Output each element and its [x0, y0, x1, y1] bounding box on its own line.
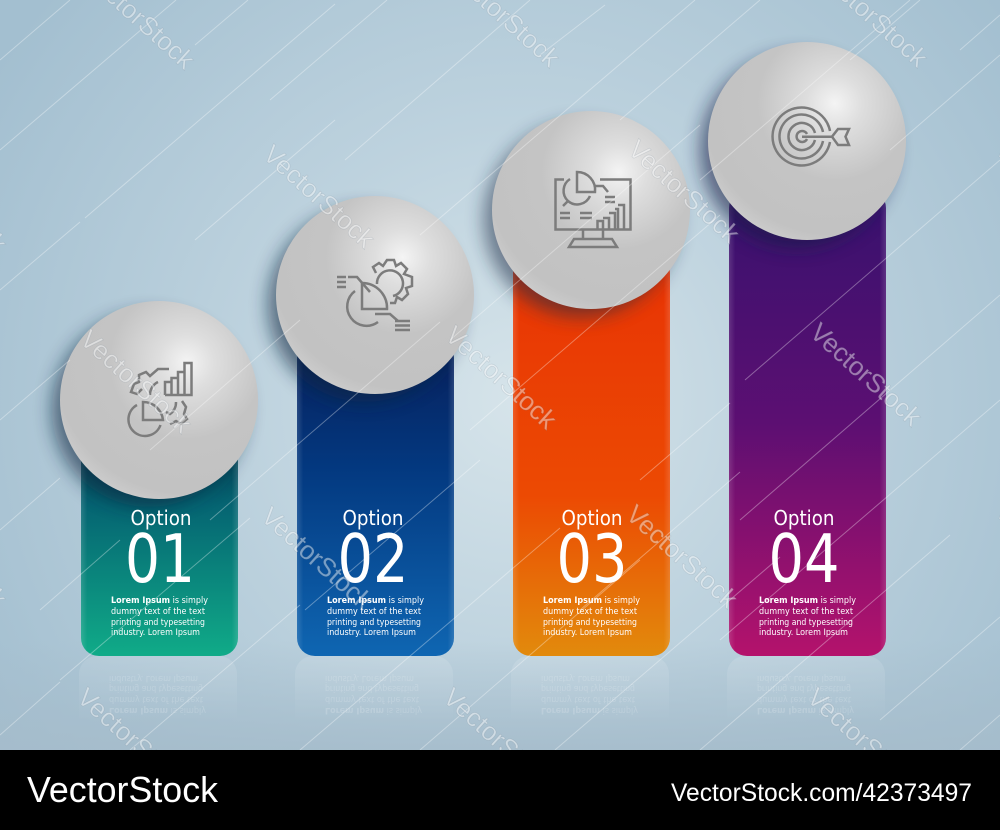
- bar 01: [81, 440, 238, 656]
- sphere shadow 03: [484, 123, 678, 317]
- icon: gear, chart and pie: [128, 363, 192, 436]
- reflection of bar 02: printing and typesetting: [325, 683, 419, 693]
- text block 04: Lorem Ipsum is simply: [759, 596, 856, 606]
- text block 01: dummy text of the text: [111, 607, 206, 617]
- footer bar: [0, 750, 1000, 830]
- watermarks: VectorStock: [439, 320, 563, 436]
- icon: gear and pie chart: [337, 260, 412, 330]
- reflection of bar 04: dummy text of the text: [757, 694, 852, 704]
- watermarks: VectorStock: [801, 682, 925, 798]
- watermarks: VectorStock: [620, 499, 744, 615]
- label: Option 01: Option: [130, 506, 192, 530]
- panel: option 01: [52, 301, 258, 722]
- watermarks: VectorStock: [74, 324, 198, 440]
- text block 01: Lorem Ipsum is simply: [111, 596, 208, 606]
- sphere shadow 04: [700, 54, 894, 248]
- panel: option 03: [484, 111, 690, 722]
- watermarks: VectorStock: [804, 317, 928, 433]
- bar 03: [513, 255, 670, 656]
- reflection of bar 01: Lorem Ipsum is simply: [109, 705, 206, 715]
- reflection of bar 01: printing and typesetting: [109, 683, 203, 693]
- reflection of bar 01: industry. Lorem Ipsum: [109, 673, 198, 683]
- reflection of bar 02: [295, 656, 453, 722]
- text block 03: printing and typesetting: [543, 618, 637, 628]
- label: Option 03: Option: [562, 506, 622, 530]
- sphere 03: [492, 111, 690, 309]
- text block 01: [111, 596, 208, 638]
- icon: target with arrow: [773, 108, 849, 166]
- text block 02: printing and typesetting: [327, 618, 421, 628]
- number 02: 02: [338, 520, 408, 598]
- reflection of bar 03: [511, 656, 669, 722]
- text block 04: printing and typesetting: [759, 618, 853, 628]
- reflection of bar 04: printing and typesetting: [757, 683, 851, 693]
- text block 03: industry. Lorem Ipsum: [543, 628, 632, 638]
- reflection of bar 03: printing and typesetting: [541, 683, 635, 693]
- text block 02: dummy text of the text: [327, 607, 422, 617]
- reflection of bar 03: industry. Lorem Ipsum: [541, 673, 630, 683]
- reflection of bar 04: industry. Lorem Ipsum: [757, 673, 846, 683]
- reflection of bar 02: industry. Lorem Ipsum: [325, 673, 414, 683]
- sphere shadow 02: [268, 208, 462, 402]
- number 04: 04: [768, 520, 840, 598]
- watermarks: VectorStock: [255, 501, 379, 617]
- sphere 02: [276, 196, 474, 394]
- text block 04: industry. Lorem Ipsum: [759, 628, 848, 638]
- text block 03: [543, 596, 640, 638]
- icon: monitor with charts: [556, 172, 630, 247]
- number 03: 03: [556, 520, 628, 598]
- watermarks: VectorStock: [622, 134, 746, 250]
- text block 03: Lorem Ipsum is simply: [543, 596, 640, 606]
- watermarks: VectorStock: [257, 139, 381, 255]
- reflection of bar 04: [727, 656, 885, 722]
- sphere shadow 01: [52, 313, 246, 507]
- reflection of bar 03: dummy text of the text: [541, 694, 636, 704]
- bar 04: [729, 190, 886, 656]
- text block 04: dummy text of the text: [759, 607, 854, 617]
- reflection of bar 01: [79, 656, 237, 722]
- reflection of bar 02: Lorem Ipsum is simply: [325, 705, 422, 715]
- text block 04: [759, 596, 856, 638]
- text block 02: Lorem Ipsum is simply: [327, 596, 424, 606]
- panel: option 04: [700, 42, 906, 722]
- text block 02: [327, 596, 424, 638]
- bar 02: [297, 340, 454, 656]
- label: Option 02: Option: [342, 506, 404, 530]
- footer image id: VectorStock.com/42373497: [671, 779, 972, 807]
- label: Option 04: Option: [774, 506, 834, 530]
- reflection of bar 04: Lorem Ipsum is simply: [757, 705, 854, 715]
- watermarks: VectorStock: [71, 682, 195, 798]
- footer brand: VectorStock: [27, 769, 219, 810]
- reflection of bar 02: dummy text of the text: [325, 694, 420, 704]
- sphere 01: [60, 301, 258, 499]
- panel: option 02: [268, 196, 474, 722]
- number 01: 01: [125, 520, 195, 598]
- sphere 04: [708, 42, 906, 240]
- text block 03: dummy text of the text: [543, 607, 638, 617]
- reflection of bar 01: dummy text of the text: [109, 694, 204, 704]
- text block 01: printing and typesetting: [111, 618, 205, 628]
- reflection of bar 03: Lorem Ipsum is simply: [541, 705, 638, 715]
- watermarks: VectorStock: [437, 682, 561, 798]
- text block 02: industry. Lorem Ipsum: [327, 628, 416, 638]
- text block 01: industry. Lorem Ipsum: [111, 628, 200, 638]
